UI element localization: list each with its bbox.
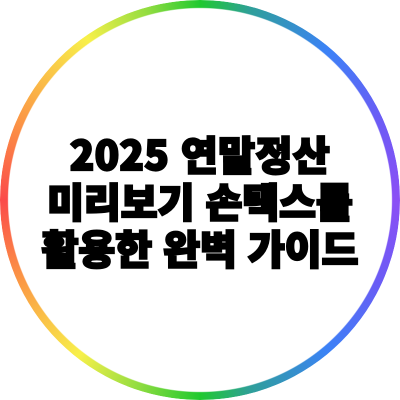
title line 1: 2025 연말정산 bbox=[70, 124, 330, 182]
title line 3: 활용한 완벽 가이드 bbox=[42, 218, 358, 276]
title line 2: 미리보기 손택스를 bbox=[47, 171, 353, 229]
